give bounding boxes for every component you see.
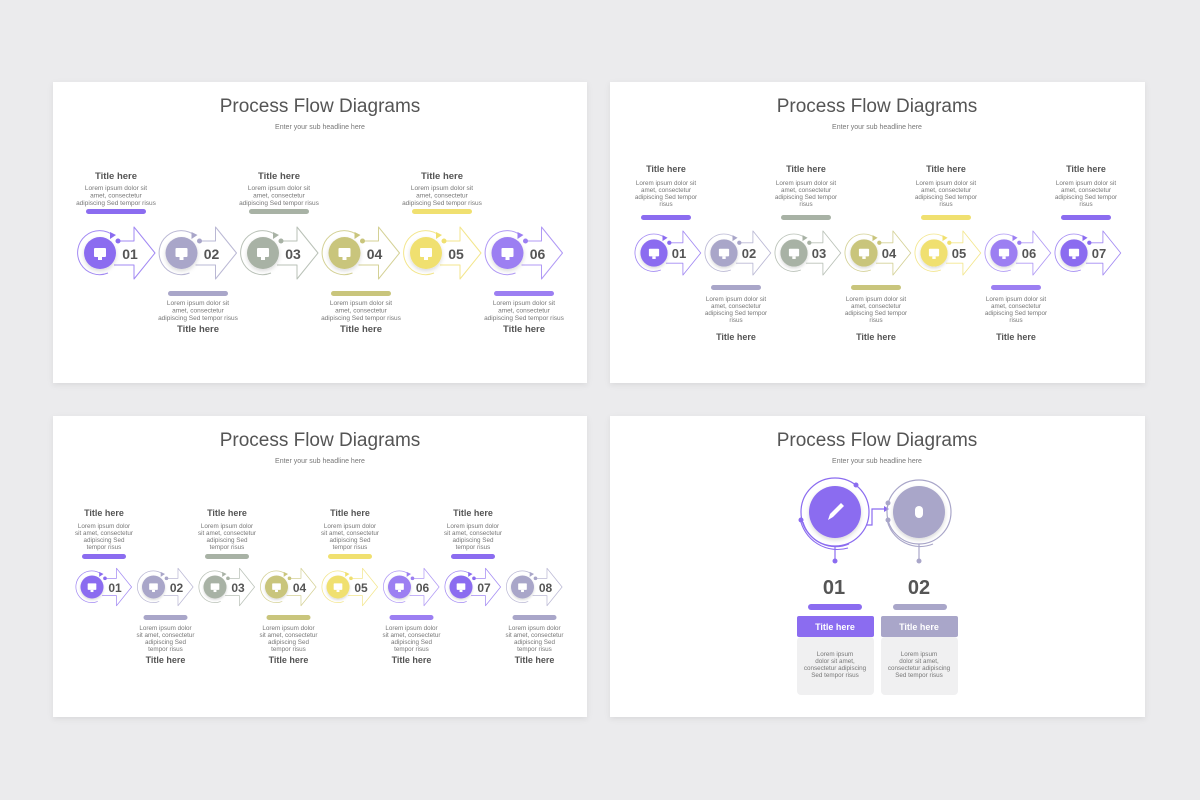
step 06: sit amet, consectetur (382, 632, 441, 639)
step 03: adipiscing Sed tempor risus (239, 200, 320, 207)
step 07: Lorem ipsum dolor sit (1056, 180, 1116, 187)
step 02: adipiscing Sed tempor (705, 310, 767, 317)
step 02 card: dolor sit amet, (899, 658, 939, 665)
step 03 (198, 508, 256, 606)
step 07 (1055, 164, 1121, 275)
step 04: Lorem ipsum dolor sit (846, 296, 906, 303)
step 04: Lorem ipsum dolor (262, 625, 315, 632)
step 02: Lorem ipsum dolor sit (167, 300, 229, 307)
step 02: 02 (204, 246, 219, 262)
step 03: Title here (207, 508, 247, 518)
step 01: adipiscing Sed (84, 537, 125, 544)
step 01: amet, consectetur (641, 187, 691, 194)
step 04: 04 (293, 581, 306, 595)
step 01: tempor risus (87, 544, 121, 551)
step 01: Title here (84, 508, 124, 518)
step 05 (321, 508, 379, 606)
step 06: Title here (996, 332, 1036, 342)
step 02: Title here (177, 324, 219, 335)
step 03 (775, 164, 841, 275)
step 01 card: dolor sit amet, (815, 658, 855, 665)
step 03: risus (799, 201, 813, 208)
step 05: amet, consectetur (921, 187, 971, 194)
step 06 (382, 568, 441, 665)
step 02 card: consectetur adipiscing (888, 665, 951, 672)
subtitle: Enter your sub headline here (275, 458, 365, 465)
step 05: adipiscing Sed tempor risus (402, 200, 483, 207)
step 02: 02 (742, 246, 756, 261)
step 02 (158, 227, 239, 335)
step 06: Title here (392, 655, 431, 665)
step 08: adipiscing Sed (514, 639, 555, 646)
step 01: amet, consectetur (90, 192, 143, 200)
step 05: Title here (421, 171, 463, 182)
step 07: sit amet, consectetur (444, 530, 502, 537)
step 06: adipiscing Sed (391, 639, 432, 646)
step 05 (915, 164, 981, 275)
step 06: 06 (1022, 246, 1036, 261)
step 06: Lorem ipsum dolor sit (493, 300, 555, 307)
step 01: 01 (122, 246, 138, 262)
step 01 card: 01 (823, 577, 845, 599)
step 03: 03 (285, 246, 301, 262)
step 06: 06 (530, 246, 545, 262)
step 07: Lorem ipsum dolor (447, 523, 499, 530)
step 05: adipiscing Sed (330, 537, 371, 544)
step 05: risus (939, 201, 953, 208)
step 04: adipiscing Sed (268, 639, 309, 646)
step 05: amet, consectetur (416, 192, 469, 200)
step 07: risus (1079, 201, 1093, 208)
step 02: amet, consectetur (711, 303, 761, 310)
step 03 (239, 171, 320, 279)
step 06: Lorem ipsum dolor (385, 625, 438, 632)
step 08: Title here (515, 655, 554, 665)
step 04: adipiscing Sed tempor risus (321, 315, 402, 322)
panel: 2-step circles (610, 416, 1145, 717)
step 02: risus (729, 317, 743, 324)
step 06: amet, consectetur (991, 303, 1041, 310)
step 03: Title here (786, 164, 826, 174)
step 02 circle (886, 480, 951, 564)
step 03: 03 (231, 581, 245, 595)
step 07: tempor risus (456, 544, 490, 551)
panel: 8-step flow (53, 416, 587, 717)
step 01: adipiscing Sed tempor risus (76, 200, 157, 207)
step 04: 04 (882, 246, 897, 261)
step 06 (985, 231, 1051, 342)
step 05 (402, 171, 483, 279)
step 06: amet, consectetur (498, 308, 551, 314)
step 04: Lorem ipsum dolor sit (330, 300, 392, 307)
step 01: sit amet, consectetur (75, 530, 133, 537)
step 05: adipiscing Sed tempor (915, 194, 977, 201)
step 02: sit amet, consectetur (136, 632, 195, 639)
step 02: 02 (170, 581, 183, 595)
step 04: amet, consectetur (851, 303, 901, 310)
step 05: Lorem ipsum dolor sit (916, 180, 976, 187)
step 07: 07 (1092, 246, 1106, 261)
step 02 card: Sed tempor risus (895, 672, 943, 679)
step 02: amet, consectetur (172, 308, 225, 314)
step 01: 01 (108, 581, 122, 595)
step 01 circle (798, 478, 889, 564)
title: Process Flow Diagrams (220, 96, 420, 117)
step 05: Lorem ipsum dolor sit (411, 185, 473, 192)
step 08: Lorem ipsum dolor (508, 625, 561, 632)
step 01 card (797, 577, 874, 695)
step 08 (505, 568, 564, 665)
step 04: Title here (269, 655, 308, 665)
step 05: sit amet, consectetur (321, 530, 379, 537)
step 04: tempor risus (271, 646, 306, 653)
step 05: Lorem ipsum dolor (324, 523, 376, 530)
step 03: Lorem ipsum dolor sit (776, 180, 836, 187)
step 01: Lorem ipsum dolor sit (636, 180, 696, 187)
step 01: risus (659, 201, 673, 208)
step 02 (705, 231, 771, 342)
step 02 card: Title here (899, 622, 939, 632)
step 01 (635, 164, 701, 275)
panel: 6-step flow (53, 82, 587, 383)
step 07 (444, 508, 502, 606)
step 02 (136, 568, 195, 665)
step 02: adipiscing Sed (145, 639, 186, 646)
step 02 card: Lorem ipsum (901, 651, 937, 658)
title: Process Flow Diagrams (777, 96, 977, 117)
step 03: Lorem ipsum dolor (201, 523, 253, 530)
step 08: tempor risus (517, 646, 552, 653)
step 06: Title here (503, 324, 545, 335)
step 03: amet, consectetur (253, 192, 306, 200)
subtitle: Enter your sub headline here (832, 458, 922, 465)
step 03: amet, consectetur (781, 187, 831, 194)
step 03: Lorem ipsum dolor sit (248, 185, 310, 192)
step 03: adipiscing Sed (207, 537, 248, 544)
step 01: Lorem ipsum dolor (78, 523, 130, 530)
step 01: Title here (646, 164, 686, 174)
step 08: 08 (539, 581, 552, 595)
step 02 card: 02 (908, 577, 930, 599)
step 05: tempor risus (333, 544, 367, 551)
step 06 (484, 227, 565, 335)
step 01 (76, 171, 157, 279)
panel: 7-step flow (610, 82, 1145, 383)
step 04: Title here (856, 332, 896, 342)
step 03: adipiscing Sed tempor (775, 194, 837, 201)
step 04: 04 (367, 246, 382, 262)
step 03: tempor risus (210, 544, 244, 551)
step 06: tempor risus (394, 646, 429, 653)
step 02: Lorem ipsum dolor (139, 625, 192, 632)
step 01: adipiscing Sed tempor (635, 194, 697, 201)
step 02: tempor risus (148, 646, 183, 653)
step 05: 05 (448, 246, 464, 262)
step 02: Lorem ipsum dolor sit (706, 296, 766, 303)
step 07: adipiscing Sed tempor (1055, 194, 1117, 201)
step 05: Title here (330, 508, 370, 518)
step 03: Title here (258, 171, 300, 182)
step 03: sit amet, consectetur (198, 530, 256, 537)
title: Process Flow Diagrams (777, 430, 977, 451)
step 01 card: consectetur adipiscing (804, 665, 867, 672)
step 07: 07 (477, 581, 491, 595)
step 01 card: Lorem ipsum (817, 651, 853, 658)
step 07: adipiscing Sed (453, 537, 494, 544)
step 04: amet, consectetur (335, 308, 388, 314)
step 04 (259, 568, 318, 665)
step 07: Title here (1066, 164, 1106, 174)
step 02: adipiscing Sed tempor risus (158, 315, 239, 322)
step 01 card: Sed tempor risus (811, 672, 859, 679)
subtitle: Enter your sub headline here (275, 124, 365, 131)
step 02 card (881, 577, 958, 695)
step 03: 03 (812, 246, 826, 261)
step 04: risus (869, 317, 883, 324)
step 04 (845, 231, 911, 342)
title: Process Flow Diagrams (220, 430, 420, 451)
step 02: Title here (716, 332, 756, 342)
step 06: Lorem ipsum dolor sit (986, 296, 1046, 303)
step 06: 06 (416, 581, 429, 595)
step 01 card: Title here (815, 622, 855, 632)
subtitle: Enter your sub headline here (832, 124, 922, 131)
step 01: Title here (95, 171, 137, 182)
step 04: adipiscing Sed tempor (845, 310, 907, 317)
step 04: Title here (340, 324, 382, 335)
step 05: Title here (926, 164, 966, 174)
step 07: Title here (453, 508, 493, 518)
step 06: risus (1009, 317, 1023, 324)
step 05: 05 (952, 246, 966, 261)
step 02: Title here (146, 655, 185, 665)
step 04: sit amet, consectetur (259, 632, 318, 639)
step 01: 01 (672, 246, 686, 261)
step 06: adipiscing Sed tempor (985, 310, 1047, 317)
step 04 (321, 227, 402, 335)
step 01 (75, 508, 133, 606)
step 06: adipiscing Sed tempor risus (484, 315, 565, 322)
step 07: amet, consectetur (1061, 187, 1111, 194)
step 05: 05 (354, 581, 368, 595)
step 08: sit amet, consectetur (505, 632, 564, 639)
step 01: Lorem ipsum dolor sit (85, 185, 147, 192)
